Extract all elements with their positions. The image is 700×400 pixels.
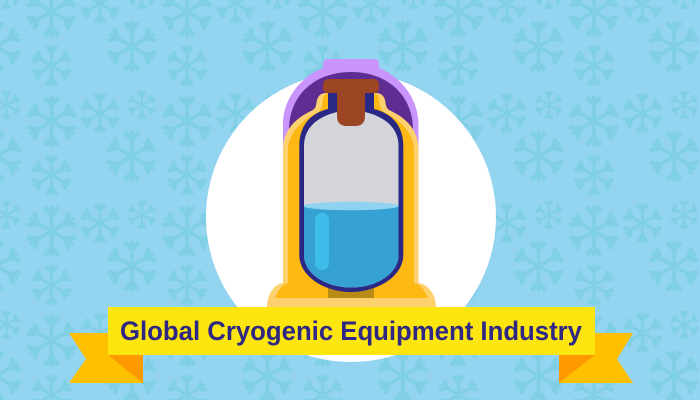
tank rear dome	[283, 59, 418, 200]
cryogenic liquid	[304, 202, 398, 288]
tank stand	[328, 280, 374, 298]
white circle backdrop	[206, 72, 496, 362]
ribbon: right tail	[559, 333, 633, 383]
ribbon: left tail	[69, 333, 143, 383]
inner vessel outline	[299, 93, 403, 292]
brown stopper	[323, 79, 379, 126]
title: Global Cryogenic Equipment Industry	[120, 316, 582, 346]
inner vessel gas space	[304, 112, 398, 288]
tank outer yellow shell	[267, 93, 436, 308]
icon: cryogenic tank	[267, 59, 436, 308]
banner	[108, 307, 595, 355]
liquid highlight	[315, 213, 329, 270]
